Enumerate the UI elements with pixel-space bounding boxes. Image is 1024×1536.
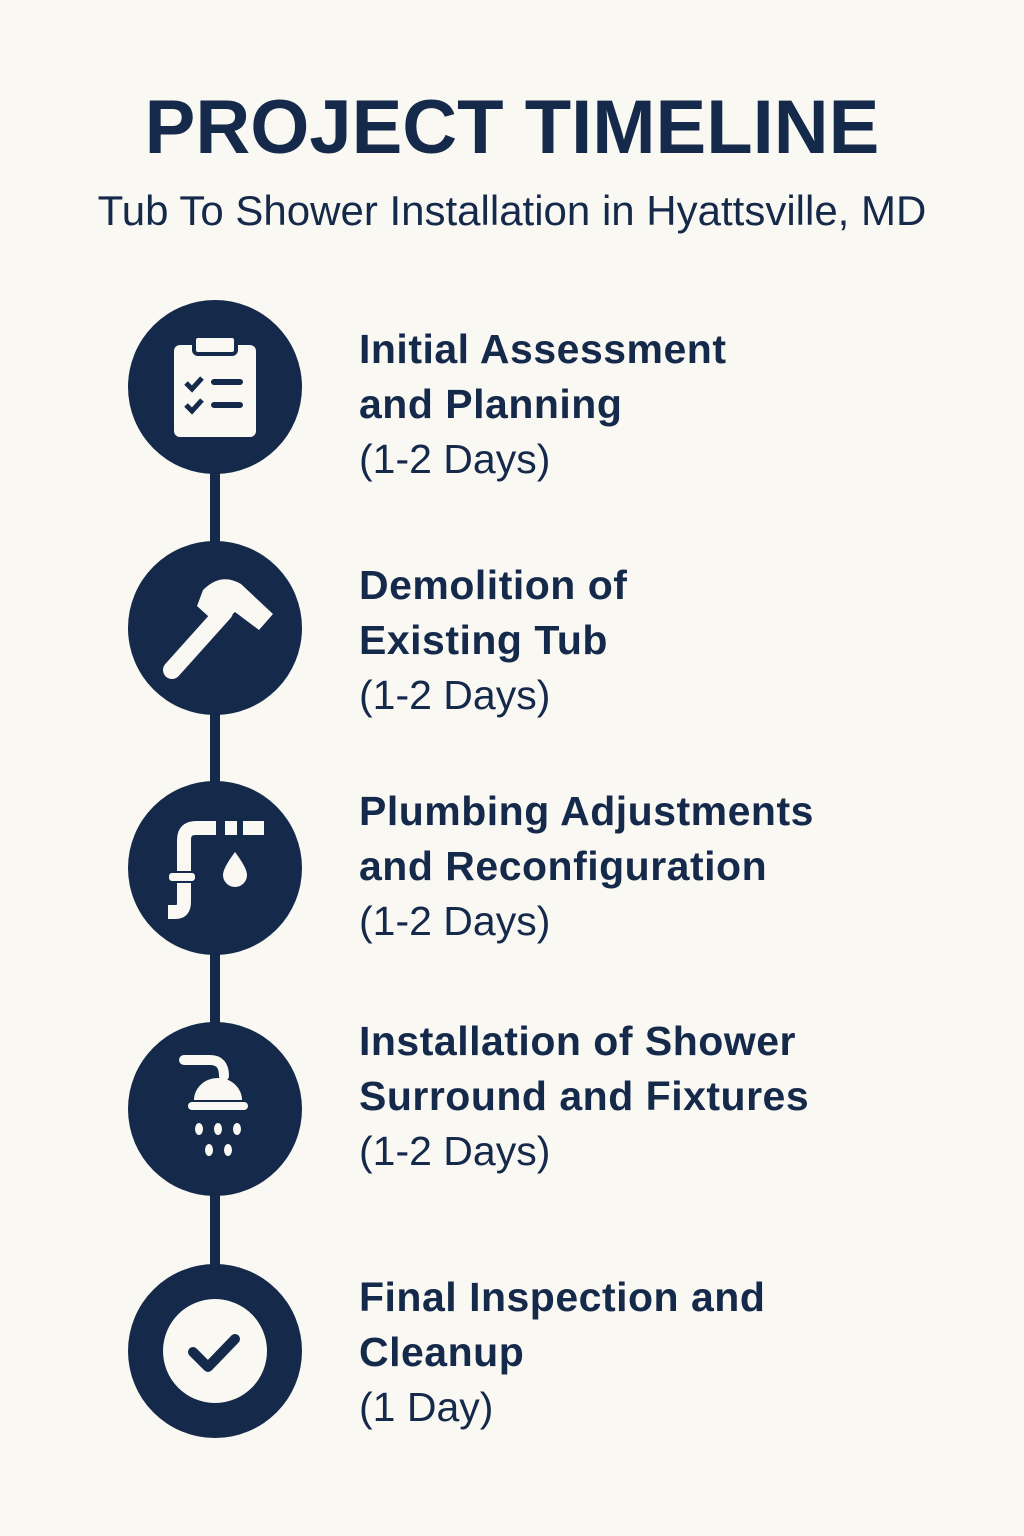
icon: shower	[128, 1022, 302, 1196]
step 2 text: (1-2 Days)	[359, 672, 550, 718]
title: PROJECT TIMELINE	[145, 85, 879, 170]
icon: clipboard	[128, 300, 302, 474]
step 5 text	[359, 1274, 765, 1430]
step 3 text: Plumbing Adjustments	[359, 788, 814, 834]
step 4 text: Installation of Shower	[359, 1018, 796, 1064]
step 4 text: Surround and Fixtures	[359, 1073, 809, 1119]
step 2 text	[359, 562, 627, 718]
connector line	[210, 387, 220, 1351]
step 4 text	[359, 1018, 809, 1174]
step 5 text: (1 Day)	[359, 1384, 493, 1430]
step 2 text: Demolition of	[359, 562, 627, 608]
step 2 text: Existing Tub	[359, 617, 608, 663]
step 1 text: Initial Assessment	[359, 326, 727, 372]
step 3 text	[359, 788, 814, 944]
step 4 text: (1-2 Days)	[359, 1128, 550, 1174]
step 3 text: and Reconfiguration	[359, 843, 767, 889]
icon: check	[128, 1264, 302, 1438]
step 1 text: (1-2 Days)	[359, 436, 550, 482]
step 5 text: Cleanup	[359, 1329, 524, 1375]
step 3 text: (1-2 Days)	[359, 898, 550, 944]
step 5 text: Final Inspection and	[359, 1274, 765, 1320]
subtitle: Tub To Shower Installation in Hyattsville, MD	[98, 187, 926, 234]
icon: hammer	[128, 541, 302, 715]
step 1 text	[359, 326, 727, 482]
icon: pipe with drop	[128, 781, 302, 955]
step 1 text: and Planning	[359, 381, 622, 427]
